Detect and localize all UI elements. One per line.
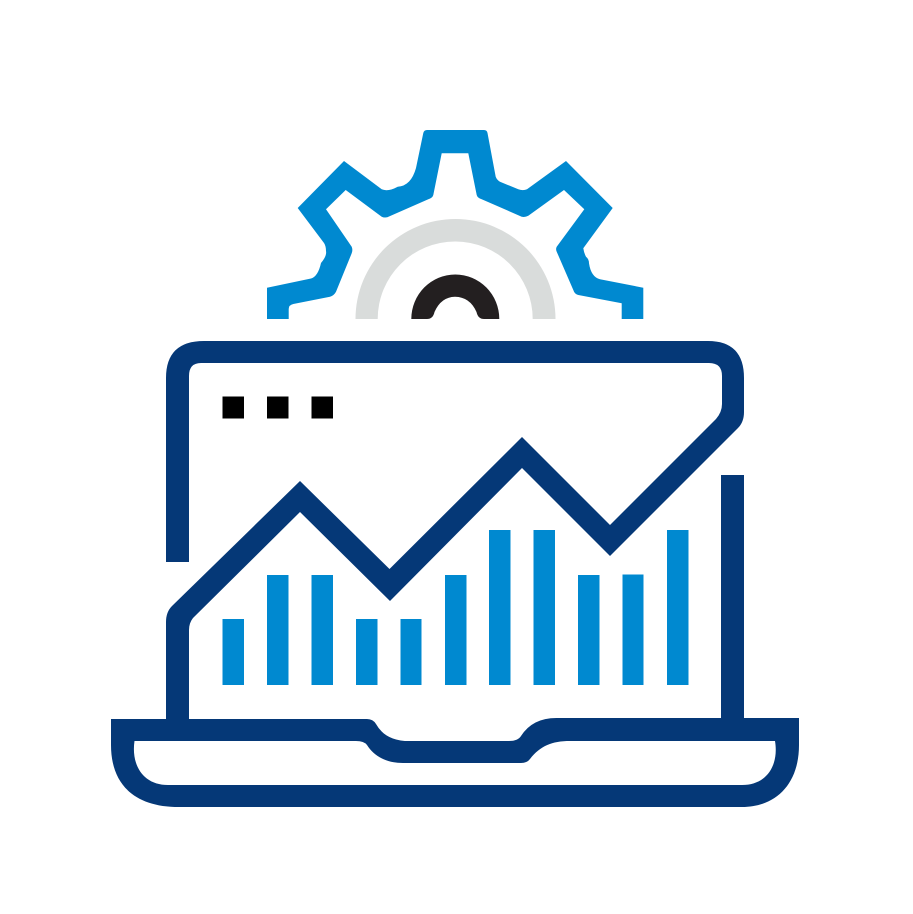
gear outer teeth	[267, 130, 643, 319]
gear gray ring	[356, 219, 556, 319]
window control dots	[222, 396, 333, 418]
bar chart	[222, 530, 688, 685]
gear black hub	[411, 274, 499, 319]
laptop screen right edge	[721, 475, 744, 725]
icon: gear	[267, 130, 643, 319]
laptop screen frame and chart line	[166, 341, 744, 720]
laptop base	[111, 718, 799, 807]
icon: laptop	[111, 341, 799, 807]
